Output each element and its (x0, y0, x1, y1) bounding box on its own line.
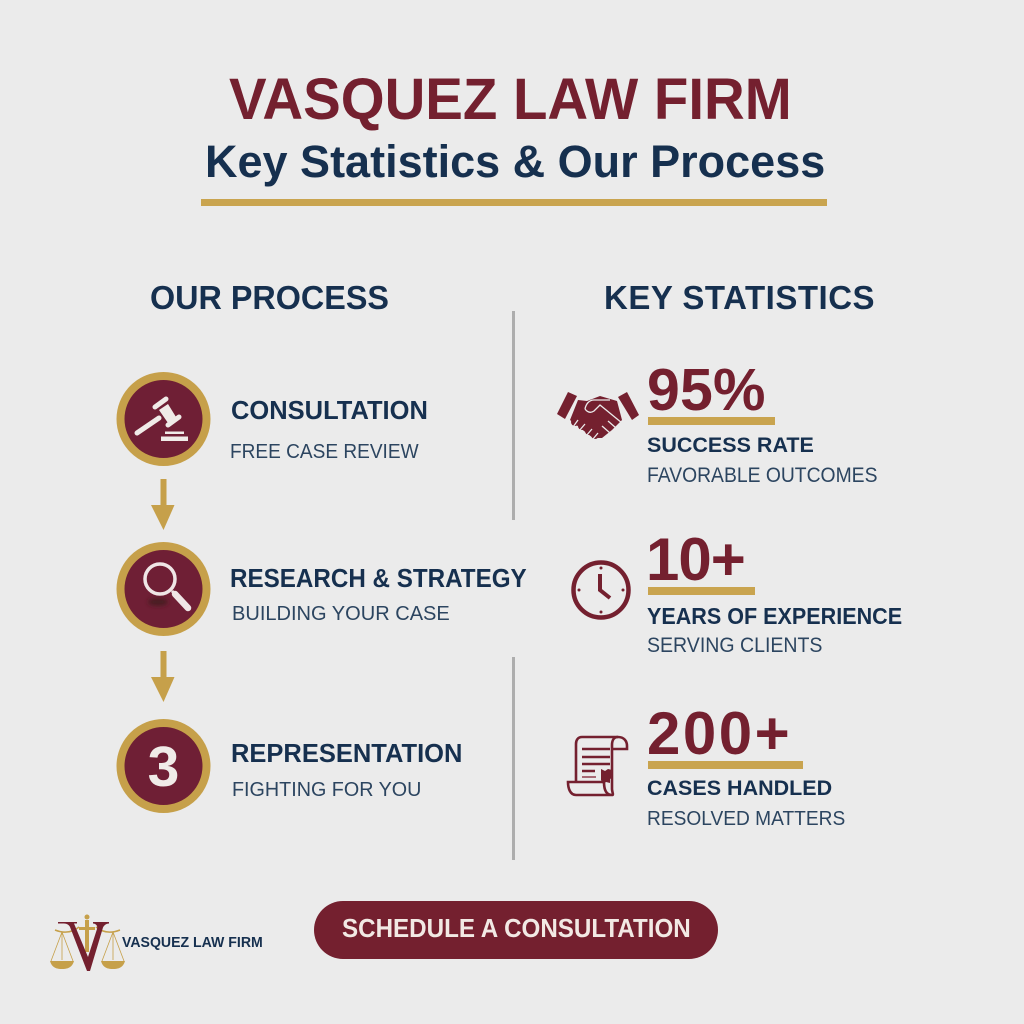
stat 2 label: YEARS OF EXPERIENCE (647, 602, 902, 628)
heading: key statistics: KEY STATISTICS (604, 279, 875, 316)
step 1 icon: gavel (116, 372, 210, 466)
stat 3 description: RESOLVED MATTERS (647, 806, 845, 830)
arrow 1 (151, 479, 174, 530)
stat 3 icon: scroll (566, 736, 628, 796)
stat 3 label: CASES HANDLED (647, 776, 832, 800)
stat 2 value: 10+ (646, 526, 745, 593)
stat 1 label: SUCCESS RATE (647, 433, 814, 457)
call to action button (314, 901, 718, 959)
step 3 description: FIGHTING FOR YOU (232, 778, 421, 801)
logo wordmark: VASQUEZ LAW FIRM (122, 934, 263, 950)
stat 1 icon: handshake (557, 392, 639, 439)
title: VASQUEZ LAW FIRM (229, 67, 792, 132)
stat 2 gold bar (648, 587, 755, 595)
step 2 title: RESEARCH & STRATEGY (230, 564, 527, 592)
stat 3 value: 200+ (647, 700, 792, 767)
stat 3 gold bar (648, 761, 803, 769)
stat 2 description: SERVING CLIENTS (647, 634, 822, 657)
step 3 icon: number 3: 3 (148, 735, 179, 799)
arrow 2 (151, 651, 174, 702)
button label: SCHEDULE A CONSULTATION (342, 915, 691, 943)
step 1 description: FREE CASE REVIEW (230, 440, 419, 462)
logo mark: V with scales (50, 914, 125, 971)
title underline (201, 199, 827, 206)
stat 2 icon: clock (571, 560, 631, 620)
logo (50, 914, 263, 971)
step 1 title: CONSULTATION (231, 397, 428, 425)
heading: our process: OUR PROCESS (150, 279, 389, 316)
step 2 description: BUILDING YOUR CASE (232, 602, 450, 625)
stat 1 value: 95% (647, 357, 766, 423)
step 2 icon: magnifier (116, 542, 210, 636)
step 3 title: REPRESENTATION (231, 740, 462, 768)
stat 1 gold bar (648, 417, 775, 425)
stat 1 description: FAVORABLE OUTCOMES (647, 464, 877, 487)
subtitle: Key Statistics & Our Process (205, 136, 825, 186)
step 3 icon: number 3 (116, 719, 210, 813)
